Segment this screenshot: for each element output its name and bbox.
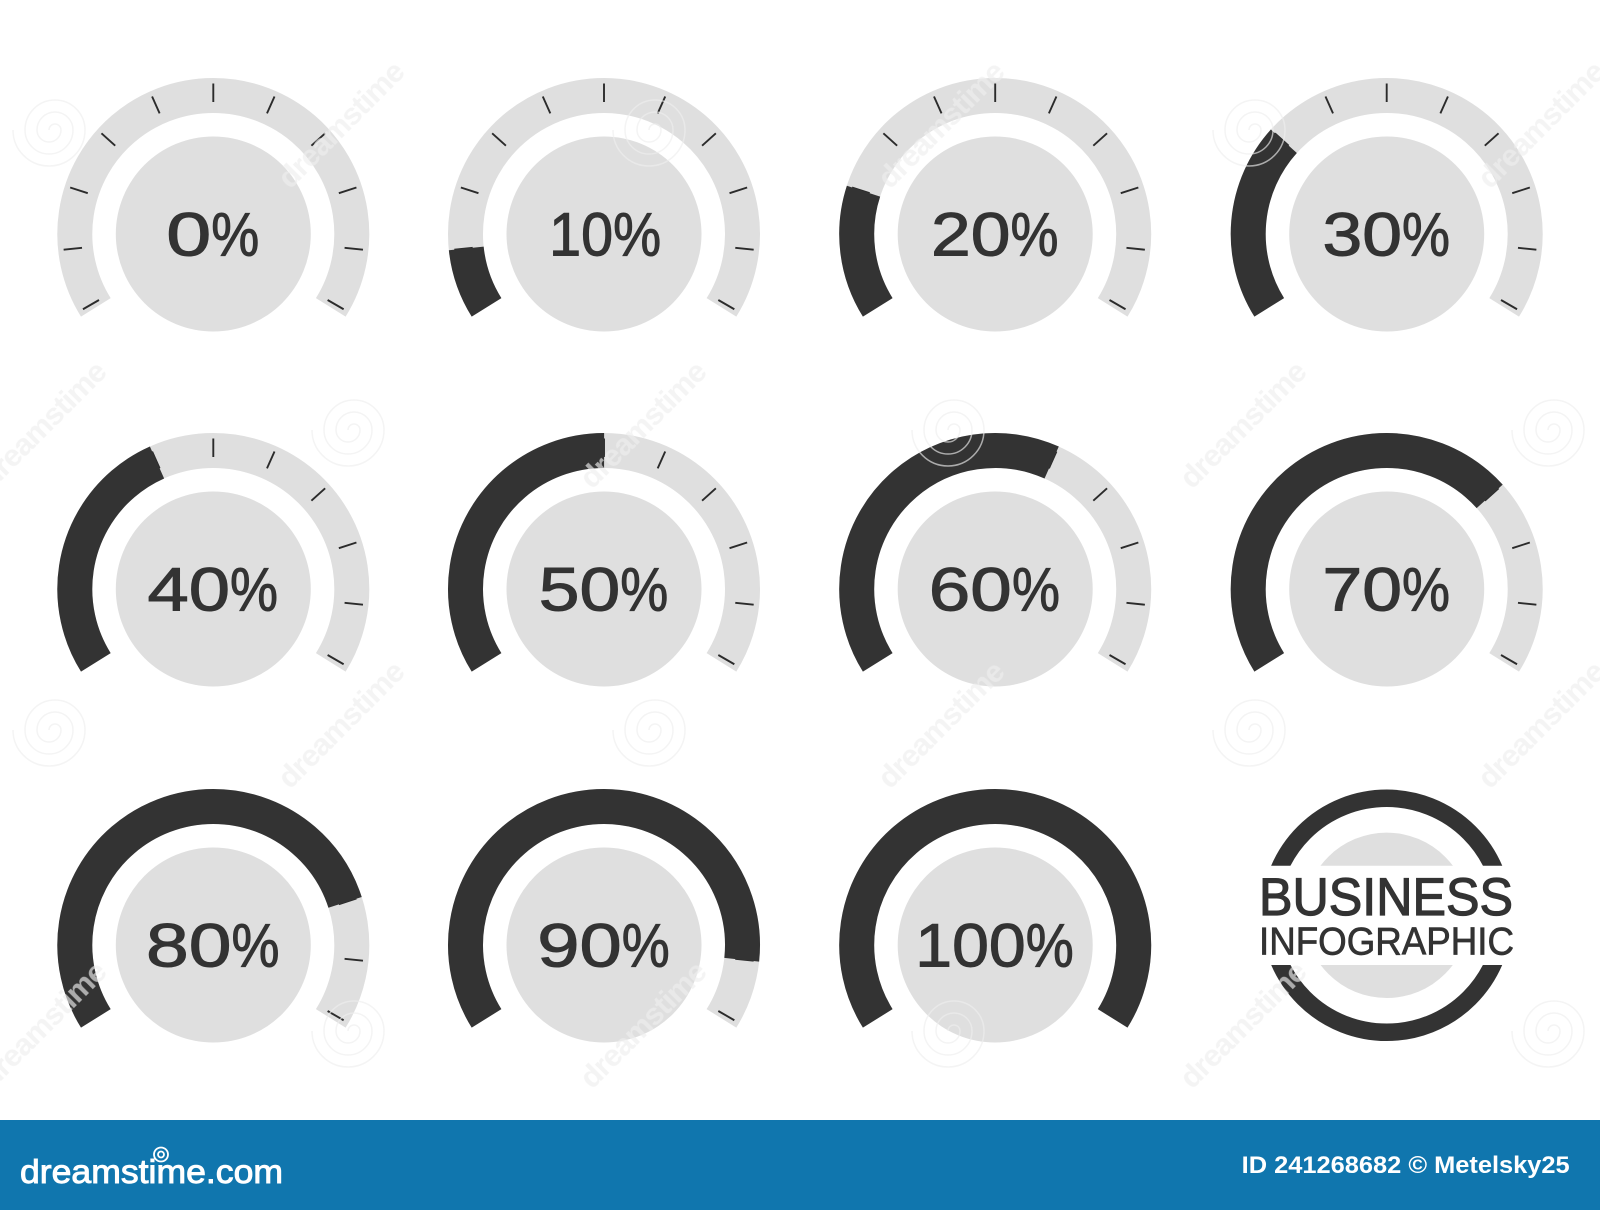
icon: spiral above logo <box>154 1148 168 1162</box>
label 90%: 90 <box>537 912 622 980</box>
label 10%: % <box>613 200 661 268</box>
gauge 70% <box>1237 438 1536 686</box>
gauge 40% <box>64 438 363 686</box>
label 40%: 40 <box>148 556 230 624</box>
watermark overlay: dreamstime <box>270 654 412 795</box>
label 60%: % <box>1012 556 1060 624</box>
label 20%: 20 <box>931 200 1010 268</box>
gauge 90% <box>454 794 754 1042</box>
label 50% <box>539 556 668 624</box>
label 0%: 0 <box>166 200 211 268</box>
label 100% <box>915 912 1074 980</box>
gauge 10% <box>454 84 754 332</box>
watermark overlay: dreamstime <box>270 54 412 195</box>
gauge 60% <box>846 438 1145 686</box>
footer bar <box>0 1120 1600 1210</box>
watermark overlay: dreamstime <box>1172 354 1314 495</box>
label 10%: 10 <box>549 200 613 268</box>
label 80% <box>146 912 280 980</box>
watermark overlay: dreamstime <box>870 654 1012 795</box>
label 90% <box>537 912 670 980</box>
gauge 50% <box>454 438 754 686</box>
label 80%: 80 <box>146 912 232 980</box>
gauge 80% <box>64 794 363 1042</box>
label 60% <box>929 556 1060 624</box>
label 70%: % <box>1402 556 1450 624</box>
label 30%: % <box>1402 200 1450 268</box>
label 20% <box>931 200 1058 268</box>
business infographic badge <box>1259 798 1514 1032</box>
watermark overlay: dreamstime <box>572 954 714 1095</box>
footer image id and credit: ID 241268682 © Metelsky25 <box>1242 1152 1570 1179</box>
gauge 0% <box>64 84 363 332</box>
label 0% <box>166 200 259 268</box>
badge text: business: BUSINESS <box>1259 868 1513 927</box>
label 100%: 100 <box>915 912 1026 980</box>
watermark overlay: dreamstime <box>870 54 1012 195</box>
label 60%: 60 <box>929 556 1012 624</box>
gauge 100% <box>846 794 1145 1042</box>
label 100%: % <box>1026 912 1074 980</box>
label 40% <box>148 556 278 624</box>
label 70%: 70 <box>1322 556 1402 624</box>
label 70% <box>1322 556 1450 624</box>
label 10% <box>549 200 661 268</box>
label 50%: % <box>620 556 668 624</box>
label 0%: % <box>211 200 259 268</box>
label 50%: 50 <box>539 556 620 624</box>
gauge 30% <box>1237 84 1536 332</box>
label 30% <box>1322 200 1450 268</box>
badge text: infographic: INFOGRAPHIC <box>1259 920 1514 963</box>
watermark overlay: dreamstime <box>1172 954 1314 1095</box>
label 20%: % <box>1010 200 1058 268</box>
label 80%: % <box>232 912 280 980</box>
footer logo text: dreamstime.com <box>20 1153 283 1190</box>
watermark overlay: dreamstime <box>572 354 714 495</box>
label 90%: % <box>622 912 670 980</box>
label 40%: % <box>230 556 278 624</box>
label 30%: 30 <box>1322 200 1402 268</box>
gauge 20% <box>846 84 1145 332</box>
